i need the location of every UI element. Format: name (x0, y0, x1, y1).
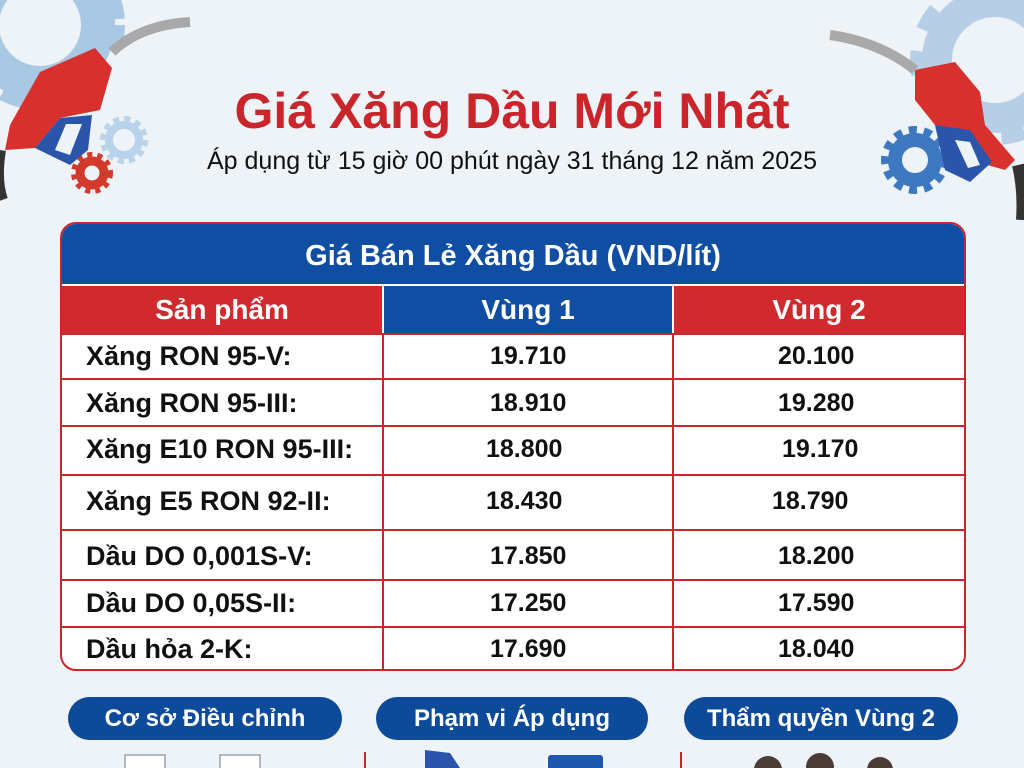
row 4: 18.430 (486, 487, 562, 515)
table header (62, 224, 964, 284)
row 5 (86, 541, 854, 571)
row 6: Dầu DO 0,05S-II: (86, 588, 296, 618)
row 6: 17.250 (490, 589, 566, 617)
row 4 (86, 486, 848, 516)
pill: scope: Phạm vi Áp dụng (414, 705, 610, 732)
row 6: 17.590 (778, 589, 854, 617)
column header: zone 2: Vùng 2 (772, 294, 866, 325)
subtitle: Áp dụng từ 15 giờ 00 phút ngày 31 tháng 12 năm 2025 (207, 147, 817, 175)
row 1: Xăng RON 95-V: (86, 341, 292, 371)
row 2: 19.280 (778, 389, 854, 417)
row 5: 18.200 (778, 542, 854, 570)
row 6 (86, 588, 854, 618)
pill: adjustment basis (68, 697, 342, 740)
row 5: 17.850 (490, 542, 566, 570)
row 4: Xăng E5 RON 92-II: (86, 486, 331, 516)
column header: zone 1: Vùng 1 (481, 294, 575, 325)
row 2: Xăng RON 95-III: (86, 388, 298, 418)
pill: scope (376, 697, 648, 740)
row 7: 17.690 (490, 635, 566, 663)
column header: zone 2 (674, 286, 964, 333)
row 7: 18.040 (778, 635, 854, 663)
title: Giá Xăng Dầu Mới Nhất (234, 83, 790, 139)
row 1: 20.100 (778, 342, 854, 370)
row 7 (86, 634, 854, 664)
row 5: Dầu DO 0,001S-V: (86, 541, 313, 571)
column header: product (62, 286, 382, 333)
row 3: Xăng E10 RON 95-III: (86, 434, 353, 464)
decoration: left pump and gears (0, 0, 190, 201)
row 2: 18.910 (490, 389, 566, 417)
row 3: 19.170 (782, 435, 858, 463)
row 1 (86, 341, 854, 371)
pill: adjustment basis: Cơ sở Điều chỉnh (105, 705, 305, 732)
row 1: 19.710 (490, 342, 566, 370)
column header: product: Sản phẩm (155, 294, 289, 325)
row 2 (86, 388, 854, 418)
row 3: 18.800 (486, 435, 562, 463)
icons: bottom partial (124, 750, 893, 768)
column header: zone 1 (384, 286, 672, 333)
price table (60, 222, 966, 671)
row 3 (86, 434, 858, 464)
pill: zone 2 authority (684, 697, 958, 740)
pill: zone 2 authority: Thẩm quyền Vùng 2 (707, 705, 935, 732)
decoration: right pump and gears (829, 0, 1024, 220)
row 4: 18.790 (772, 487, 848, 515)
table header: Giá Bán Lẻ Xăng Dầu (VND/lít) (305, 240, 721, 272)
row 7: Dầu hỏa 2-K: (86, 634, 253, 664)
